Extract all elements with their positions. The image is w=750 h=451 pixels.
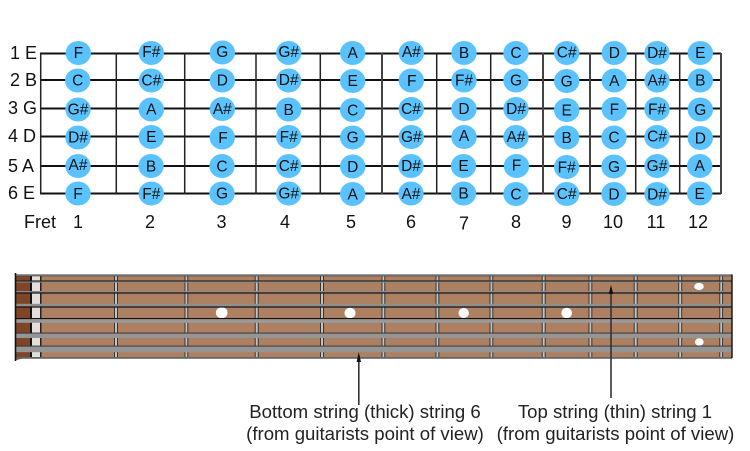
fret number row: 12: [688, 212, 708, 232]
notes: fret 5: A: [348, 186, 359, 204]
string labels: 5 A: [8, 156, 34, 176]
fret number row: 5: [346, 212, 356, 232]
nut: [30, 275, 42, 358]
fret number row: 1: [73, 212, 83, 232]
fret number row: 6: [406, 212, 416, 232]
notes: fret 7: F#: [455, 72, 473, 90]
notes: fret 2: A: [146, 102, 157, 118]
notes: fret 11: F#: [648, 102, 666, 118]
notes: fret 12: A: [695, 158, 706, 175]
notes: fret 1: G#: [68, 102, 89, 118]
strings: [16, 274, 732, 359]
fret number row: 7: [459, 214, 469, 234]
string labels: 1 E: [10, 43, 37, 63]
fret number row: Fret: [24, 212, 56, 232]
fret number row: 11: [647, 212, 665, 232]
notes: fret 8: C: [510, 186, 522, 204]
chart grid: strings and frets: [40, 53, 721, 194]
fret number row: [24, 212, 708, 234]
caption: top string: (from guitarists point of view): [497, 423, 734, 444]
notes: fret 8: D#: [506, 101, 526, 118]
caption: bottom string: Bottom string (thick) string 6: [249, 401, 481, 422]
notes: fret 2: E: [146, 129, 156, 146]
notes: fret 8: A#: [507, 129, 526, 146]
caption: top string: Top string (thin) string 1: [518, 401, 712, 422]
notes: fret 6: [398, 41, 424, 206]
notes: fret 8: G: [510, 72, 522, 90]
notes: fret 3: D: [217, 72, 228, 90]
headstock end: [16, 274, 30, 360]
notes: fret 8: F: [512, 158, 521, 174]
notes: fret 11: C#: [647, 128, 667, 146]
notes: fret 3: A#: [213, 101, 232, 118]
notes: fret 10: D: [608, 186, 620, 204]
notes: fret 10: C: [608, 130, 620, 146]
notes: fret 4: G#: [278, 44, 299, 61]
notes: fret 6: C#: [401, 101, 421, 118]
notes: fret 7: [451, 41, 477, 206]
notes: fret 9: [554, 41, 579, 206]
notes: fret 4: G#: [278, 186, 299, 202]
notes: fret 7: B: [458, 186, 469, 202]
notes: fret 1: [65, 41, 91, 206]
notes: fret 4: C#: [279, 158, 299, 175]
notes: fret 3: G: [216, 44, 228, 61]
notes: fret 4: B: [284, 102, 294, 119]
fret number row: 3: [216, 212, 227, 232]
notes: fret 7: D: [458, 101, 470, 118]
notes: fret 6: D#: [401, 158, 421, 175]
string labels: 3 G: [8, 98, 37, 118]
frets: [114, 275, 723, 358]
notes: fret 11: [644, 41, 670, 206]
position markers: [216, 283, 704, 346]
notes: fret 5: G: [347, 130, 359, 146]
caption: bottom string: (from guitarists point of view): [246, 423, 484, 444]
notes: fret 11: D#: [647, 45, 667, 62]
notes: fret 5: C: [347, 102, 358, 120]
notes: fret 6: F: [407, 73, 416, 90]
fretboard wood: [41, 275, 732, 358]
string labels: [8, 43, 37, 203]
neck outline edges: [16, 273, 732, 361]
notes: fret 2: F#: [142, 186, 161, 203]
notes: fret 9: B: [562, 130, 572, 147]
notes: fret 2: C#: [141, 72, 162, 90]
notes: fret 9: C#: [557, 186, 577, 203]
fret number row: 9: [561, 212, 572, 232]
notes: fret 2: [138, 41, 164, 206]
notes: fret 6: A#: [402, 186, 421, 203]
notes: fret 2: B: [146, 158, 156, 176]
arrow: to top string: [609, 285, 613, 398]
caption: top string: [497, 401, 734, 444]
notes: fret 1: D#: [68, 130, 88, 146]
notes: fret 1: F: [73, 186, 83, 203]
notes: fret 7: E: [458, 158, 469, 175]
string labels: 4 D: [8, 126, 36, 146]
notes: fret 5: [340, 41, 365, 206]
notes: fret 3: G: [216, 186, 228, 202]
string labels: 6 E: [8, 183, 35, 203]
notes: fret 3: F: [218, 130, 228, 147]
string labels: 2 B: [10, 70, 37, 90]
notes: fret 6: G#: [401, 129, 422, 146]
notes: fret 12: E: [695, 45, 705, 62]
notes: fret 12: B: [695, 72, 705, 90]
notes: fret 12: G: [694, 102, 706, 119]
notes: fret 10: G: [608, 159, 620, 176]
notes: fret 10: F: [610, 102, 619, 118]
notes: fret 3: [209, 40, 235, 206]
notes: fret 11: A#: [648, 72, 667, 90]
fret number row: 10: [603, 212, 623, 232]
notes: fret 10: [601, 41, 627, 206]
notes: fret 7: B: [459, 45, 469, 62]
notes: fret 4: [276, 41, 301, 206]
notes: fret 3: C: [216, 158, 228, 176]
notes: fret 12: E: [695, 186, 705, 203]
notes: fret 1: A#: [69, 157, 88, 174]
notes: fret 9: F#: [558, 160, 576, 176]
notes: fret 5: A: [348, 45, 359, 62]
notes: fret 9: G: [561, 74, 573, 90]
notes: fret 1: C: [72, 72, 83, 90]
fret number row: 8: [511, 212, 521, 232]
notes: fret 9: E: [562, 102, 572, 120]
notes: fret 2: F#: [142, 44, 161, 61]
notes: fret 12: D: [695, 130, 706, 148]
fretboard note chart: [8, 40, 721, 234]
notes: fret 7: A: [459, 128, 470, 145]
notes: fret 5: E: [348, 73, 358, 90]
notes: fret 10: A: [609, 73, 620, 90]
notes: fret 4: F#: [280, 129, 298, 146]
notes: fret 4: D#: [279, 72, 299, 89]
notes: fret 5: D: [347, 159, 358, 176]
fret number row: 2: [145, 212, 155, 232]
caption: bottom string: [246, 401, 484, 444]
notes: fret 9: C#: [557, 44, 577, 62]
fret number row: 4: [280, 212, 290, 232]
guitar neck illustration: [16, 273, 732, 361]
notes: fret 8: C: [510, 45, 522, 62]
notes: fret 6: A#: [402, 44, 421, 61]
notes: fret 11: G#: [647, 158, 668, 175]
notes: fret 10: D: [609, 45, 620, 62]
notes: fret 12: [687, 41, 713, 206]
notes: fret 11: D#: [647, 186, 667, 204]
notes: fret 1: F: [74, 45, 83, 62]
notes: fret 8: [503, 41, 529, 206]
arrow: to bottom string: [357, 352, 361, 405]
